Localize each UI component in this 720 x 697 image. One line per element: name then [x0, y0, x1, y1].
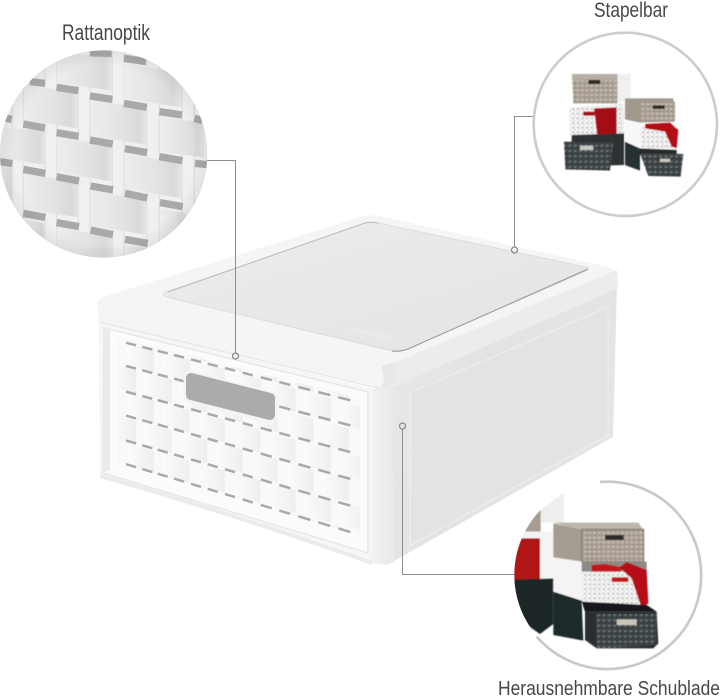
- product: white drawer box: [97, 215, 618, 565]
- connector: Stapelbar: [512, 116, 533, 253]
- dark drawer: [553, 592, 658, 648]
- circle: rattan detail: [0, 50, 208, 258]
- taupe drawer: [553, 523, 644, 562]
- left stack: [564, 74, 631, 171]
- label: Rattanoptik: Rattanoptik: [62, 20, 151, 45]
- vertical strands: [12, 47, 194, 263]
- circle: removable drawer photo: [510, 482, 701, 669]
- background stack: [510, 493, 564, 634]
- right stack: [625, 98, 683, 177]
- drawer handle: [191, 378, 271, 417]
- box side panel: [368, 285, 617, 565]
- dark gaps: [0, 53, 207, 243]
- woven blocks: [0, 55, 204, 263]
- circle: stackable photo: [534, 33, 717, 216]
- lid: [97, 215, 618, 388]
- rattan weave front: [118, 340, 360, 534]
- white drawer: [553, 557, 648, 608]
- drawer front frame: [99, 322, 372, 565]
- connector: Schublade: [400, 423, 516, 574]
- connector: Rattanoptik: [203, 160, 238, 359]
